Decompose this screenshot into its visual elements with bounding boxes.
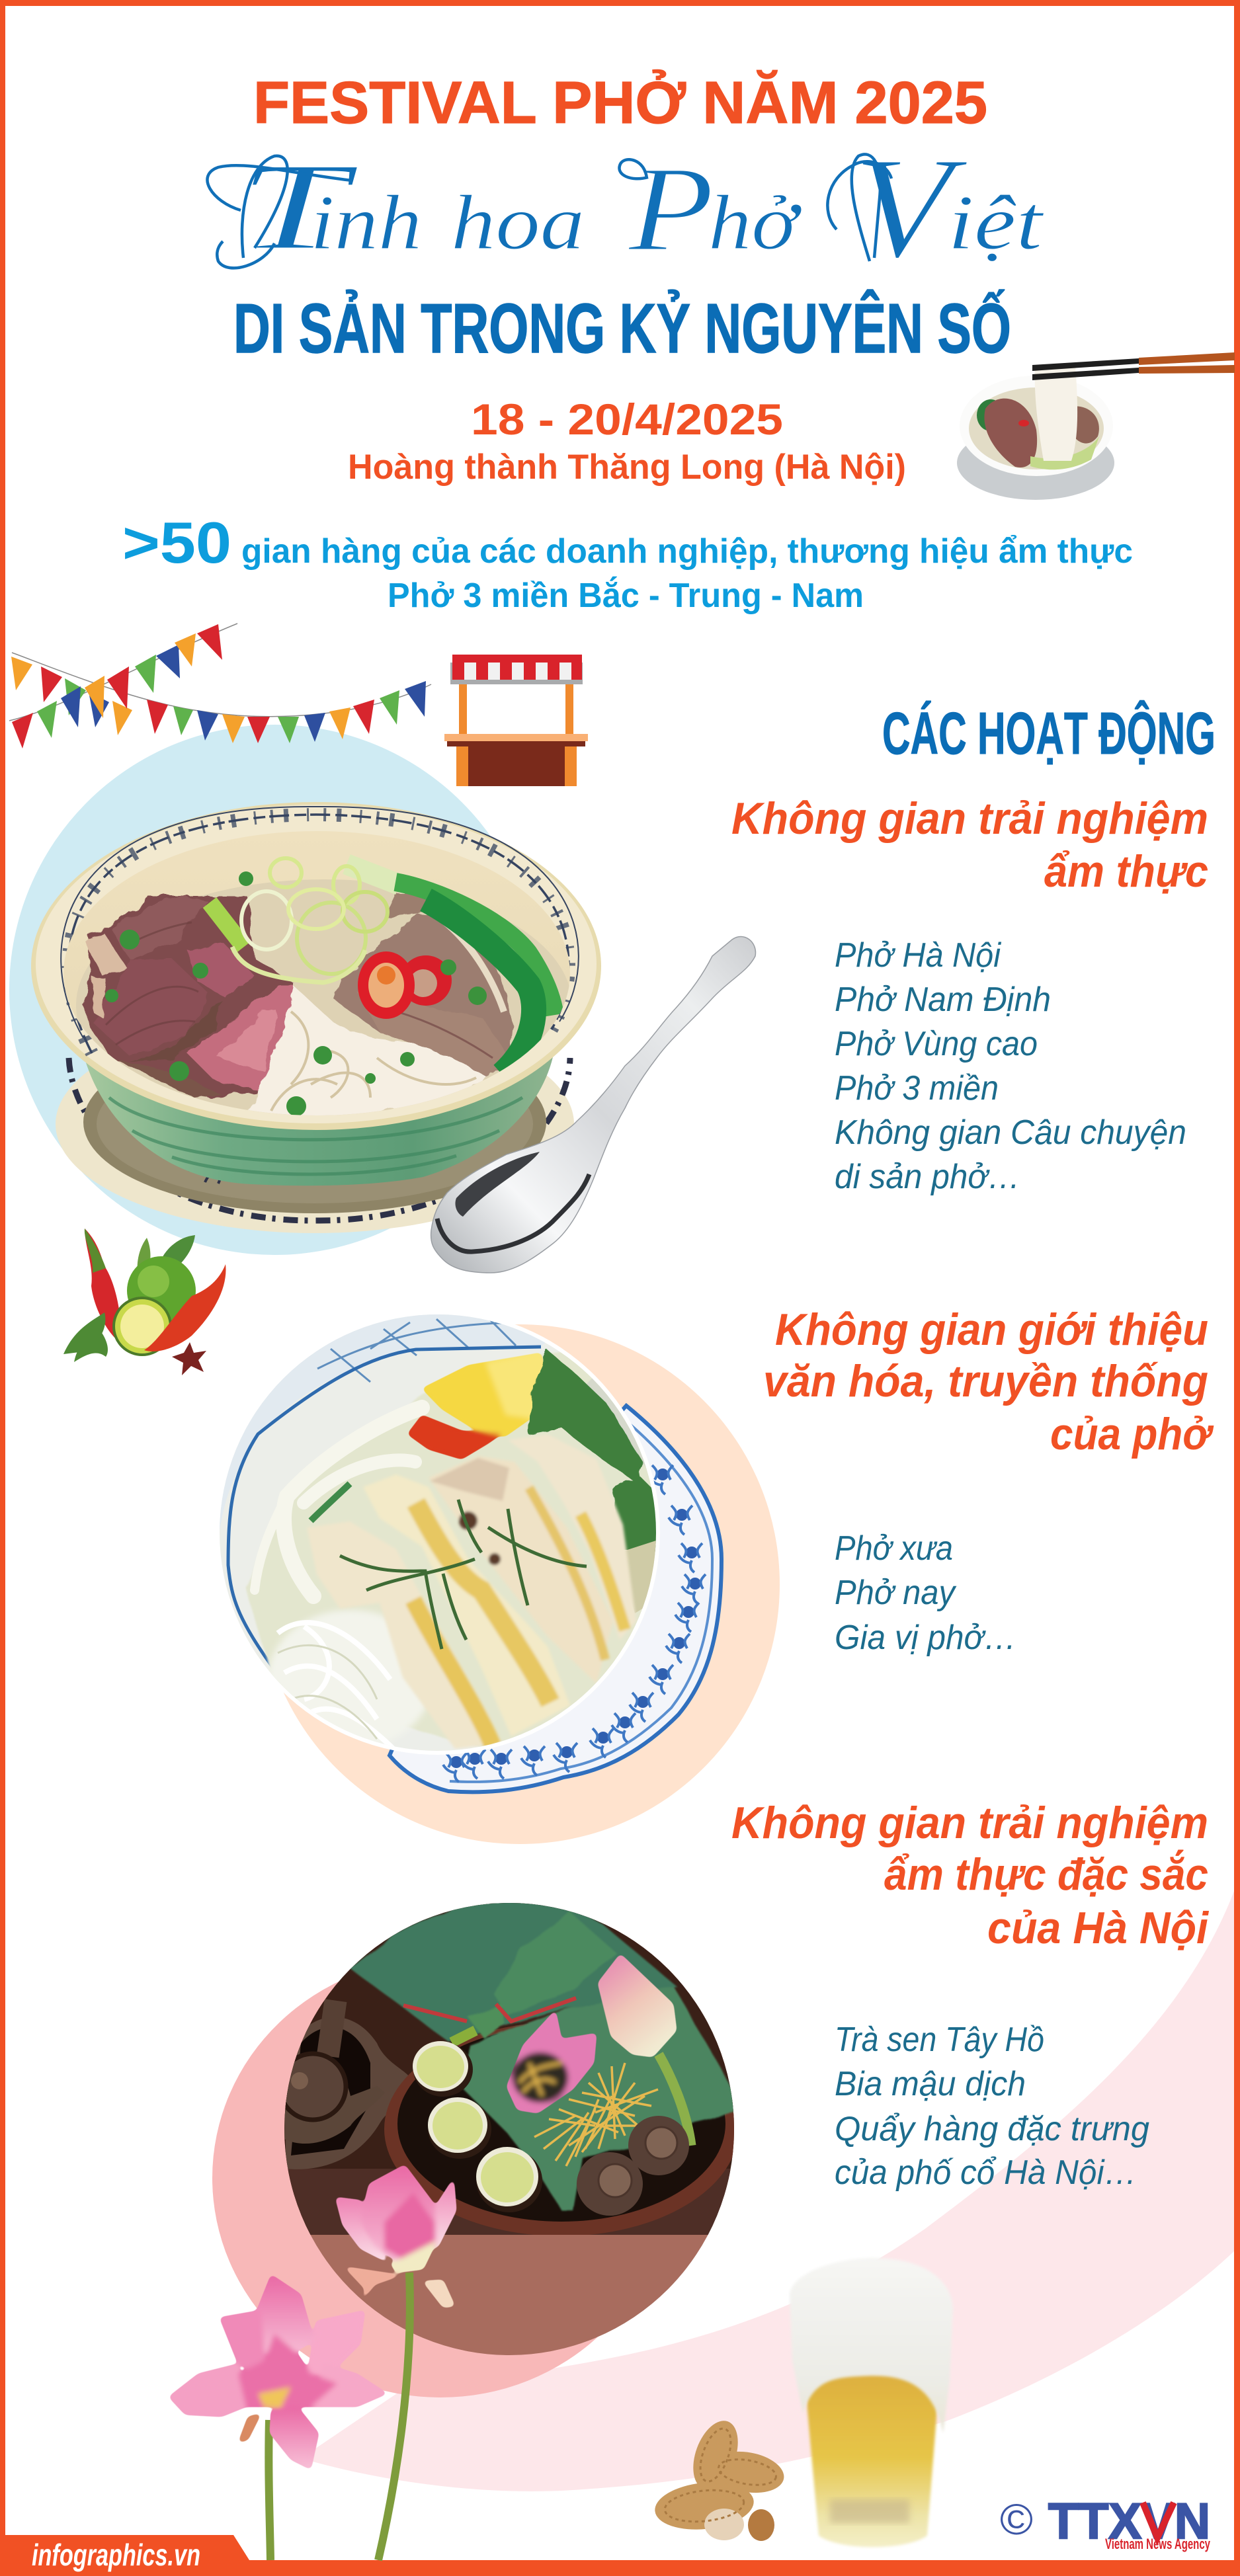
lotus stamens: [534, 2063, 658, 2166]
logo: TTXVN: TTXVN: [1048, 2493, 1210, 2550]
title: script line: [207, 127, 1045, 288]
title: script line: iệt: [948, 179, 1045, 266]
date: 18 - 20/4/2025: [471, 395, 783, 444]
section 3 list: của phố cổ Hà Nội…: [835, 2153, 1137, 2192]
title: script line: inh: [310, 179, 422, 266]
saucer: [56, 1015, 574, 1233]
stat: more than 50 stalls: gian hàng của các doanh nghiệp, thương hiệu ẩm thực: [241, 532, 1133, 571]
tea cups: [413, 2041, 542, 2212]
photo: lotus tea tray: [265, 1898, 754, 2355]
section 2 list: Phở xưa: [835, 1529, 953, 1568]
section 1 list: di sản phở…: [835, 1158, 1020, 1196]
section 2 heading: Không gian giới thiệu: [775, 1305, 1208, 1355]
background circle: light blue: [9, 725, 540, 1255]
bowl photo circle: [216, 1310, 660, 1755]
section 1 list: Phở 3 miền: [835, 1069, 999, 1107]
title: script line: hở: [708, 179, 802, 266]
section 2 list: Phở nay: [835, 1574, 957, 1612]
illustration: lotus flower with stem: [169, 2274, 388, 2560]
title: script line: V: [853, 127, 968, 288]
background swoosh: pale pink: [301, 1874, 1240, 2491]
source label: infographics.vn: [32, 2538, 200, 2572]
section 3 list: [835, 2021, 1149, 2192]
venue: Hoàng thành Thăng Long (Hà Nội): [348, 448, 906, 487]
open lotus with tea: [507, 2010, 597, 2113]
bowl rim: [31, 802, 601, 1130]
icon: chili, lime and star anise: [63, 1228, 226, 1375]
illustration: peanuts: [653, 2415, 787, 2541]
title: festival: FESTIVAL PHỞ NĂM 2025: [253, 69, 987, 136]
section 2 heading: [763, 1305, 1214, 1459]
section 1 heading: Không gian trải nghiệm: [731, 793, 1208, 844]
photo: chicken pho bowl: [216, 1310, 722, 1792]
soup contents: [76, 858, 572, 1131]
bunting flags: [9, 624, 431, 748]
icon: food stall: [444, 655, 588, 786]
illustration: glass of beer: [790, 2258, 953, 2547]
section 1 list: [835, 936, 1186, 1196]
blue plate: [390, 1406, 722, 1792]
section 3 heading: ẩm thực đặc sắc: [884, 1849, 1208, 1900]
footer tab: [0, 2535, 249, 2576]
clay cups upside down: [577, 2116, 689, 2216]
section 2 heading: của phở: [1050, 1409, 1214, 1459]
photo: beef pho bowl: [31, 802, 601, 1233]
title: script line: T: [238, 138, 359, 276]
section 1 heading: [731, 793, 1208, 897]
section 1 heading: ẩm thực: [1044, 846, 1208, 897]
stat: more than 50 stalls: Phở 3 miền Bắc - Trung - Nam: [388, 576, 864, 615]
icon: spoon: [431, 936, 755, 1273]
logo: TTXVN: ©: [1000, 2495, 1033, 2544]
chicken slices: [307, 1434, 636, 1749]
illustration: lotus bud with stem: [335, 2165, 456, 2560]
section 3 heading: Không gian trải nghiệm: [731, 1798, 1208, 1848]
title: script line: P: [628, 141, 714, 277]
tea leaves: [350, 1901, 744, 2210]
section 3 list: Quẩy hàng đặc trưng: [835, 2110, 1149, 2148]
section 3 list: Bia mậu dịch: [835, 2065, 1026, 2103]
lotus bud: [598, 1954, 677, 2057]
section 3 list: Trà sen Tây Hồ: [835, 2021, 1044, 2059]
section 3 heading: của Hà Nội: [987, 1903, 1210, 1953]
title: script line: hoa: [451, 179, 585, 266]
section 1 list: Không gian Câu chuyện: [835, 1113, 1186, 1152]
section 2 list: [835, 1529, 1016, 1657]
bowl interior wall: [63, 831, 570, 1115]
section 1 list: Phở Hà Nội: [835, 936, 1001, 975]
background circle: peach: [260, 1324, 780, 1844]
background circle: rose: [212, 1958, 669, 2397]
rim vine pattern: [61, 807, 579, 1053]
section 2 list: Gia vị phở…: [835, 1619, 1016, 1657]
section 3 heading: [731, 1798, 1210, 1953]
section 1 list: Phở Nam Định: [835, 981, 1051, 1019]
icon: small pho bowl with chopsticks: [957, 352, 1235, 500]
section 2 heading: văn hóa, truyền thống: [763, 1356, 1208, 1406]
round tray: [384, 2022, 739, 2236]
stat: more than 50 stalls: >50: [122, 510, 231, 575]
teapot: [280, 1999, 415, 2169]
section 1 list: Phở Vùng cao: [835, 1025, 1038, 1063]
stat: more than 50 stalls: [122, 510, 1133, 615]
green bowl body: [83, 1051, 554, 1186]
